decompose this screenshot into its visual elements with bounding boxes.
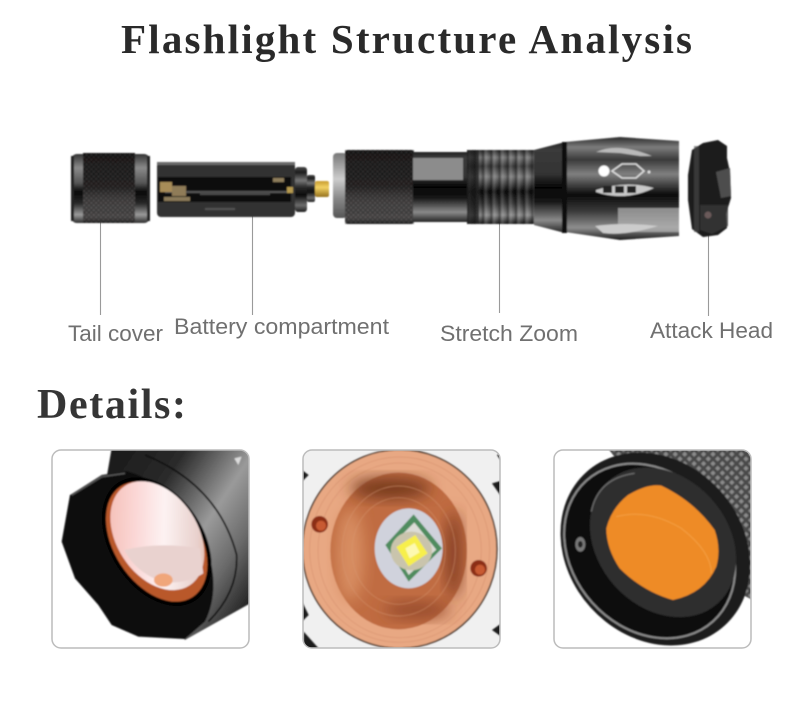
leader lines bbox=[100, 196, 708, 316]
label: attack head: Attack Head bbox=[650, 318, 773, 343]
part: tail cover bbox=[71, 153, 150, 223]
detail card: battery cap bbox=[553, 449, 752, 649]
part: stretch zoom body bbox=[333, 137, 679, 240]
part: attack head bbox=[688, 140, 731, 237]
label: stretch zoom: Stretch Zoom bbox=[440, 321, 578, 346]
label: battery compartment: Battery compartment bbox=[174, 314, 389, 339]
detail card: lens bbox=[52, 448, 253, 648]
detail card: LED bbox=[302, 450, 504, 648]
part: battery compartment bbox=[157, 162, 329, 217]
label: tail cover: Tail cover bbox=[68, 321, 163, 346]
title: Flashlight Structure Analysis bbox=[121, 16, 692, 62]
flashlight exploded view bbox=[71, 137, 731, 316]
heading: details: Details: bbox=[37, 382, 186, 428]
